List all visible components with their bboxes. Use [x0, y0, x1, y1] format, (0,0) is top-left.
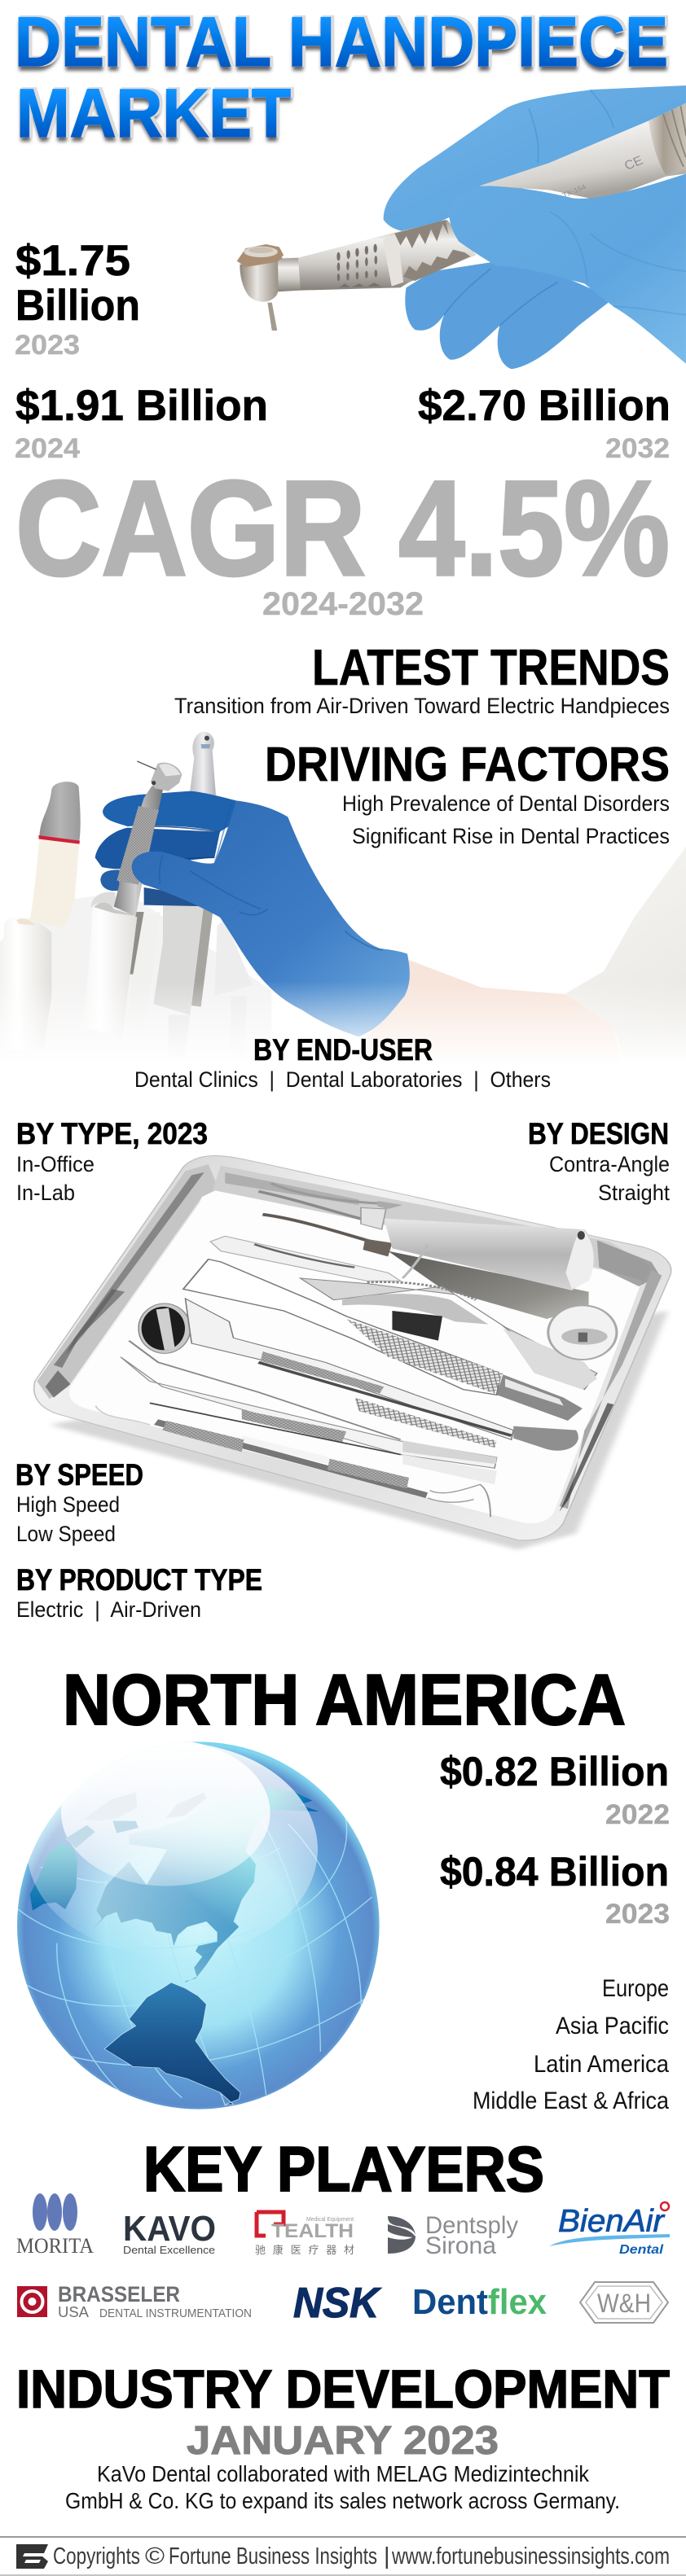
instrument: elevator — [210, 1236, 401, 1281]
arctic islands — [94, 1793, 206, 1819]
by speed: BY SPEED — [15, 1458, 143, 1492]
industry development: JANUARY 2023 — [187, 2419, 499, 2463]
stat: 2024 market size: $1.91 Billion — [15, 382, 268, 430]
footer: Copyrights — [53, 2543, 140, 2569]
north america values: 2022 — [605, 1799, 670, 1830]
logo: Brasseler: DENTAL INSTRUMENTATION — [99, 2307, 252, 2320]
stat: 2024 market size — [15, 382, 268, 464]
footer — [0, 2536, 686, 2576]
globe highlight — [27, 1742, 318, 1956]
glove hand — [132, 800, 410, 1036]
industry development: GmbH & Co. KG to expand its sales network across Germany. — [65, 2488, 620, 2513]
footer: | — [384, 2543, 390, 2569]
by type: BY TYPE, 2023 — [16, 1117, 208, 1150]
north america heading: NORTH AMERICA — [63, 1659, 626, 1740]
CE mark: CE — [622, 154, 645, 173]
instrument: dental mirror — [139, 1299, 578, 1451]
logo: Dentsply Sirona: Dentsply — [425, 2212, 518, 2239]
Alaska tip — [271, 1789, 319, 1812]
fingers behind handpiece — [103, 791, 236, 832]
north america values: $0.82 Billion — [440, 1749, 669, 1794]
logo: W&H: W&H — [597, 2289, 651, 2318]
logo: Brasseler — [17, 2282, 252, 2320]
logo: NSK: NSK — [293, 2280, 381, 2327]
stat: 2032 market size: $2.70 Billion — [418, 382, 671, 430]
footer: © — [145, 2543, 165, 2569]
logo: Bien Air: BienAir — [558, 2204, 666, 2239]
instrument: round cup — [548, 1305, 617, 1360]
globe — [16, 1740, 380, 2109]
by product type — [16, 1563, 262, 1622]
by end-user — [134, 1033, 551, 1092]
title — [15, 3, 668, 151]
by type: In-Office — [16, 1152, 95, 1176]
logo: Morita: MORITA — [16, 2234, 94, 2258]
stat: 2023 market size: $1.75 — [15, 237, 130, 285]
by speed: Low Speed — [16, 1522, 116, 1546]
by type: In-Lab — [16, 1181, 75, 1205]
illustration: dental instruments tray — [34, 1156, 671, 1549]
isthmus — [185, 1977, 197, 1982]
logo: Tealth — [255, 2212, 354, 2256]
logo: Brasseler: USA — [58, 2304, 89, 2320]
logo: Tealth: 驰康医疗器材 — [255, 2244, 354, 2256]
by speed: High Speed — [16, 1492, 120, 1517]
continent: Greenland — [30, 1842, 77, 1911]
logo: Dentflex: Dentflex — [412, 2282, 547, 2322]
stat: 2023 market size: Billion — [15, 282, 140, 330]
footer: Fortune Business Insights — [169, 2543, 377, 2569]
latest trends — [174, 640, 670, 718]
logo: Morita — [16, 2193, 94, 2258]
other regions list: Europe — [602, 1975, 669, 2002]
latest trends: Transition from Air-Driven Toward Electric Handpieces — [174, 694, 670, 718]
instrument: forceps with knurled grip — [183, 1260, 597, 1421]
other regions list: Asia Pacific — [556, 2013, 669, 2039]
by product type: Electric | Air-Driven — [16, 1597, 201, 1622]
illustration: dental unit and gloved hand — [0, 731, 686, 1068]
industry development: KaVo Dental collaborated with MELAG Medizintechnik — [97, 2461, 590, 2486]
logo: Tealth: TEALTH — [271, 2220, 354, 2242]
instrument: large forceps with handle — [258, 1183, 594, 1319]
logo: Bien Air: Dental — [619, 2243, 664, 2257]
tray floor — [69, 1190, 643, 1523]
other regions list — [473, 1975, 669, 2114]
instrument: double-ended probe — [95, 1406, 490, 1517]
by end-user: BY END-USER — [253, 1033, 433, 1067]
logo: KaVo: Dental Excellence — [123, 2244, 215, 2256]
handpiece engraving: TX-164 — [561, 182, 587, 199]
continent: South America — [104, 1982, 240, 2105]
by end-user: Dental Clinics | Dental Laboratories | Others — [134, 1067, 551, 1092]
other regions list: Middle East & Africa — [473, 2088, 669, 2114]
continent: North America — [92, 1789, 319, 1977]
logo: Bien Air — [549, 2202, 670, 2257]
logo: Dentsply Sirona: Sirona — [425, 2232, 496, 2259]
north america values: $0.84 Billion — [440, 1849, 669, 1895]
north america values: 2023 — [605, 1899, 670, 1930]
stat: 2023 market size: 2023 — [15, 330, 80, 361]
instrument: tweezers — [121, 1341, 497, 1484]
forearm — [350, 959, 623, 1067]
icon: Fortune Business Insights logo — [16, 2544, 48, 2569]
by type — [16, 1117, 208, 1205]
tray inner rim reflections — [37, 1164, 662, 1512]
handpiece in hand — [112, 786, 163, 916]
driving factors — [265, 738, 670, 848]
driving factors: Significant Rise in Dental Practices — [352, 824, 670, 848]
logo: KaVo: KAVO — [123, 2209, 216, 2249]
logo: W&H — [580, 2282, 668, 2323]
CAGR callout: 2024-2032 — [262, 586, 424, 622]
by design: Contra-Angle — [549, 1152, 670, 1176]
key players heading: KEY PLAYERS — [143, 2133, 544, 2205]
sleeve — [565, 847, 686, 1067]
title: MARKET — [16, 75, 291, 151]
stat: 2032 market size: 2032 — [605, 433, 670, 464]
north america values — [440, 1749, 670, 1930]
illustration: gloved hand holding handpiece — [237, 85, 686, 369]
logo: Brasseler: BRASSELER — [58, 2282, 180, 2307]
other regions list: Latin America — [534, 2051, 669, 2078]
logo: Dentsply Sirona — [388, 2212, 518, 2259]
by speed — [15, 1458, 143, 1546]
logo: Tealth: Medical Equipment — [306, 2215, 354, 2223]
by product type: BY PRODUCT TYPE — [16, 1563, 262, 1597]
stat: 2024 market size: 2024 — [15, 433, 80, 464]
by design: Straight — [598, 1181, 670, 1205]
industry development — [16, 2359, 670, 2513]
stat: 2032 market size — [418, 382, 671, 464]
dental unit tools — [0, 731, 410, 1067]
stat: 2023 market size — [15, 237, 140, 361]
by design — [528, 1117, 670, 1205]
